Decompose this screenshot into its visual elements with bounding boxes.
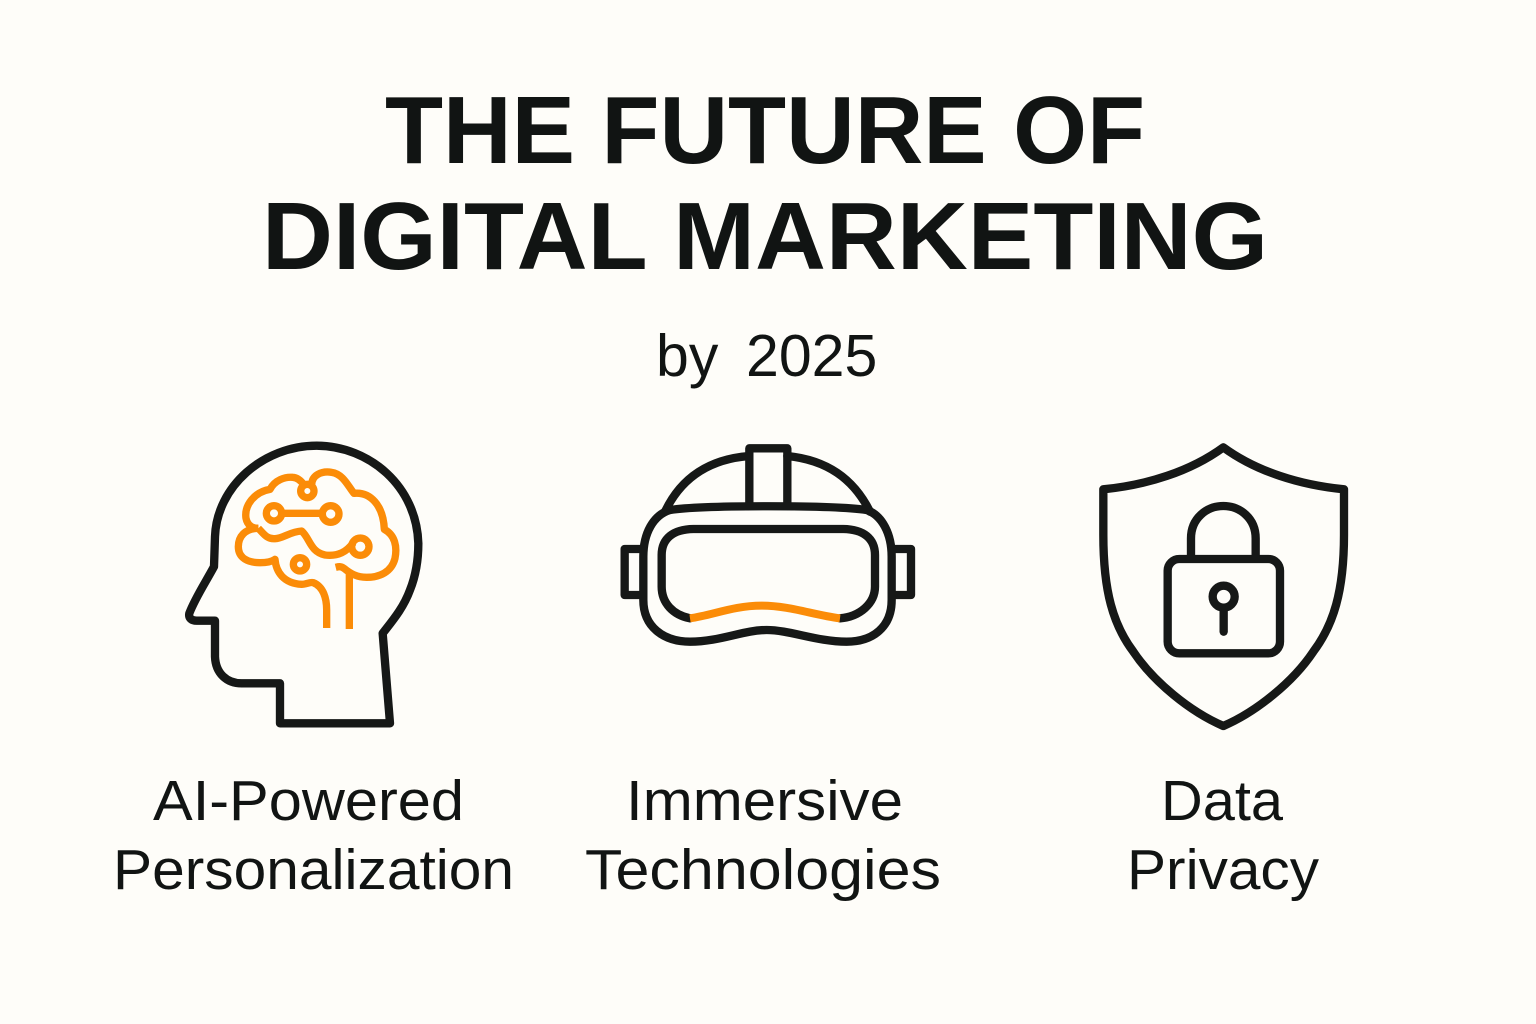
label: AI-Powered Personalization (113, 769, 514, 902)
label: AI-Powered Personalization: Personalization (113, 838, 514, 902)
visor outer shell (643, 506, 892, 642)
shield outline (1103, 447, 1344, 726)
subtitle: 2025 (746, 323, 877, 389)
visor inner lens (662, 529, 875, 618)
padlock body (1168, 559, 1280, 653)
head outline (189, 446, 418, 723)
icon: shield with padlock (1103, 447, 1344, 726)
label: AI-Powered Personalization: AI-Powered (153, 769, 464, 833)
label: Data Privacy (1127, 769, 1320, 902)
label: Immersive Technologies: Immersive (626, 769, 903, 833)
icon: head with circuit brain (189, 446, 418, 723)
headset strap (665, 456, 870, 512)
brain circuit (238, 472, 396, 629)
label: Data Privacy: Privacy (1127, 838, 1320, 902)
label: Immersive Technologies (585, 769, 941, 902)
side tabs (625, 549, 911, 595)
icon: VR headset (625, 448, 911, 642)
label: Data Privacy: Data (1161, 769, 1283, 833)
title: DIGITAL MARKETING (262, 183, 1268, 290)
orange lens accent (690, 606, 840, 618)
padlock shackle (1191, 506, 1256, 557)
label: Immersive Technologies: Technologies (585, 838, 941, 902)
title: THE FUTURE OF (385, 77, 1145, 184)
keyhole (1213, 586, 1235, 632)
title (262, 77, 1268, 290)
subtitle: by (656, 323, 719, 389)
